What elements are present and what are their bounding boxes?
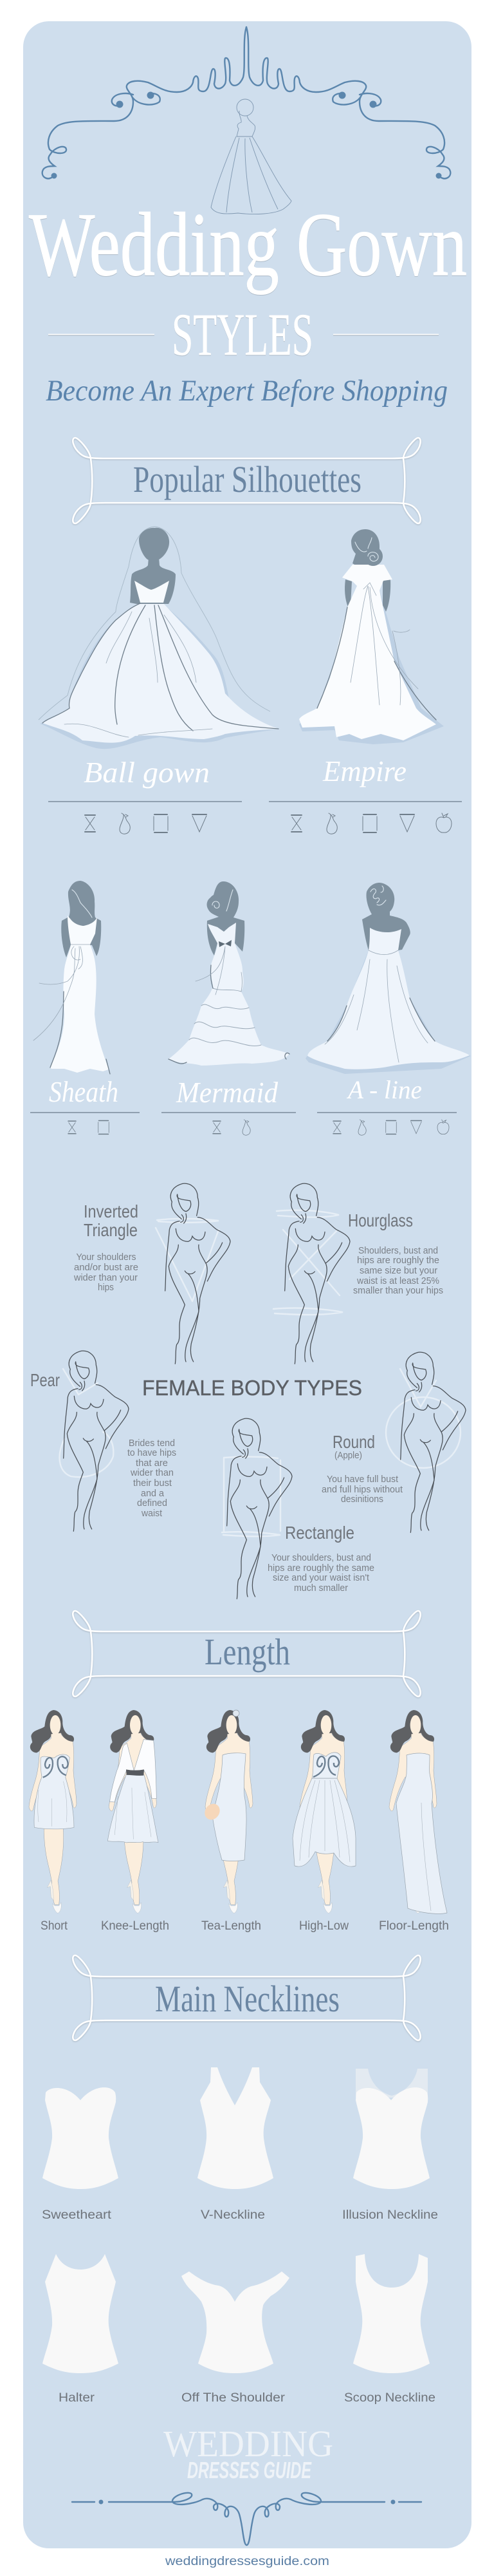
text: inverted triangle: hips: [98, 1283, 114, 1293]
label: knee-length: Knee-Length: [101, 1919, 169, 1933]
heading: female body types: FEMALE BODY TYPES: [142, 1376, 362, 1400]
bodice: v-neckline: [197, 2067, 273, 2189]
figure: rectangle: [222, 1418, 292, 1599]
text: inverted triangle: [73, 1201, 138, 1293]
text: inverted triangle: Inverted: [84, 1201, 138, 1221]
text: hourglass: waist is at least 25%: [356, 1276, 439, 1286]
label: ball gown: Ball gown: [84, 756, 210, 789]
text: round: Round: [333, 1432, 375, 1452]
bottom ornament: [72, 2493, 421, 2545]
text: rectangle: [268, 1523, 374, 1594]
text: round: You have full bust: [327, 1474, 398, 1485]
figure: hourglass: [273, 1183, 350, 1364]
silhouette: empire: [299, 529, 444, 744]
tagline: Become An Expert Before Shopping: [46, 374, 448, 408]
label: sheath: Sheath: [49, 1075, 118, 1108]
figure: round: [386, 1352, 466, 1532]
divider and icons: empire: [269, 802, 462, 834]
text: rectangle: much smaller: [294, 1583, 348, 1594]
text: inverted triangle: and/or bust are: [74, 1263, 138, 1273]
text: pear: Pear: [30, 1370, 60, 1390]
heading: popular silhouettes: Popular Silhouettes: [133, 458, 361, 500]
text: pear: defined: [137, 1498, 167, 1509]
icon: bride line drawing: [211, 99, 291, 214]
bodice: scoop neckline: [353, 2254, 430, 2373]
dress figure: tea-length: [202, 1710, 253, 1913]
label: floor-length: Floor-Length: [379, 1919, 449, 1933]
figure: inverted triangle: [156, 1183, 230, 1364]
text: round: desinitions: [341, 1494, 383, 1505]
text: pear: Brides tend: [129, 1438, 175, 1449]
text: inverted triangle: Triangle: [84, 1220, 138, 1240]
text: hourglass: hips are roughly the: [357, 1255, 439, 1266]
text: rectangle: hips are roughly the same: [268, 1563, 374, 1574]
bodice: illusion neckline: [353, 2069, 430, 2189]
label: illusion neckline: Illusion Neckline: [342, 2208, 438, 2222]
text: round: and full hips without: [322, 1485, 403, 1495]
text: pear: wider than: [130, 1468, 174, 1478]
top ornament: [42, 27, 450, 179]
figure: pear: [60, 1351, 129, 1531]
text: hourglass: Shoulders, bust and: [358, 1246, 438, 1256]
text: pear: and a: [141, 1489, 165, 1499]
label: high-low: High-Low: [299, 1919, 349, 1933]
silhouette: ball gown: [39, 527, 279, 749]
text: rectangle: Rectangle: [285, 1523, 354, 1543]
bodice: halter: [42, 2254, 118, 2373]
text: pear: their bust: [133, 1478, 172, 1489]
divider and icons: ball gown: [48, 802, 242, 834]
logo: WEDDING: [163, 2423, 333, 2465]
label: empire: Empire: [322, 755, 407, 787]
text: rectangle: Your shoulders, bust and: [271, 1553, 371, 1563]
dress figure: knee-length: [107, 1710, 158, 1913]
text: hourglass: smaller than your hips: [353, 1286, 443, 1296]
label: v-neckline: V-Neckline: [201, 2208, 265, 2222]
logo: [163, 2423, 333, 2483]
silhouette: mermaid: [169, 881, 289, 1066]
banner: main necklines: [73, 1955, 421, 2040]
text: pear: waist: [141, 1509, 162, 1519]
silhouette: sheath: [33, 881, 110, 1074]
banner: length: [73, 1611, 421, 1697]
heading: main necklines: Main Necklines: [155, 1978, 340, 2020]
label: sweetheart: Sweetheart: [42, 2208, 112, 2222]
dress figure: short: [29, 1710, 77, 1913]
bodice: off the shoulder: [181, 2271, 289, 2373]
website url: weddingdressesguide.com: [165, 2555, 329, 2568]
text: pear: [30, 1370, 176, 1519]
label: short: Short: [41, 1919, 68, 1933]
divider and icons: mermaid: [161, 1113, 296, 1135]
label: scoop neckline: Scoop Neckline: [344, 2391, 435, 2405]
dress figure: floor-length: [389, 1710, 447, 1913]
text: round: (Apple): [334, 1451, 362, 1461]
text: hourglass: [348, 1210, 443, 1296]
label: off the shoulder: Off The Shoulder: [181, 2391, 286, 2405]
banner: popular silhouettes: [73, 438, 421, 523]
text: inverted triangle: wider than your: [73, 1273, 138, 1283]
subtitle: styles: STYLES: [172, 302, 313, 368]
label: mermaid: Mermaid: [176, 1076, 279, 1109]
text: inverted triangle: Your shoulders: [76, 1252, 136, 1263]
text: hourglass: same size but your: [360, 1266, 437, 1276]
text: round: [322, 1432, 403, 1505]
silhouette: a-line: [306, 883, 471, 1074]
label: a-line: A - line: [346, 1075, 422, 1104]
text: pear: that are: [136, 1458, 168, 1469]
divider and icons: sheath: [30, 1113, 140, 1134]
heading: length: Length: [205, 1631, 290, 1673]
text: hourglass: Hourglass: [348, 1210, 413, 1230]
label: tea-length: Tea-Length: [201, 1919, 261, 1933]
text: pear: to have hips: [127, 1448, 176, 1458]
dress figure: high-low: [293, 1710, 356, 1913]
divider and icons: a-line: [317, 1113, 457, 1135]
bodice: sweetheart: [42, 2087, 118, 2189]
label: halter: Halter: [59, 2391, 95, 2405]
text: rectangle: size and your waist isn't: [273, 1573, 369, 1583]
logo: DRESSES GUIDE: [187, 2457, 312, 2483]
